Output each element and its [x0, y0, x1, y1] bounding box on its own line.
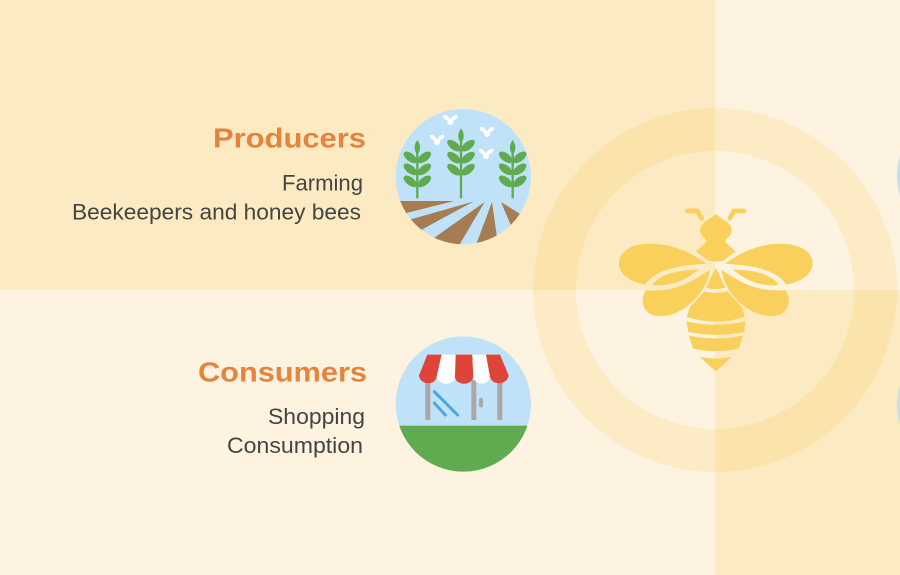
bee body [687, 268, 745, 371]
furrows [397, 201, 522, 247]
icon: partial circle bottom right [897, 337, 900, 473]
heading: Consumers: Consumers [198, 356, 367, 388]
text: Farming: Farming [282, 170, 363, 196]
icon: partial circle top right [897, 108, 900, 244]
text: Beekeepers and honey bees: Beekeepers and honey bees [72, 200, 361, 224]
heading: Producers: Producers [213, 122, 366, 154]
window glints [434, 392, 458, 415]
bee antennae [687, 211, 744, 218]
icon: market stall [390, 336, 537, 476]
awning [419, 355, 442, 383]
bee right wings [722, 244, 812, 316]
icon: farm field with wheat and bees [396, 109, 531, 247]
honeycomb ring around bee [533, 108, 897, 472]
wheat plants [404, 140, 432, 198]
bee head and thorax [696, 214, 736, 262]
text: Consumption: Consumption [227, 433, 363, 458]
bee emblem [619, 211, 812, 371]
ground [399, 426, 528, 472]
posts [425, 380, 502, 420]
flying bees [442, 114, 458, 125]
text: Shopping: Shopping [268, 404, 365, 429]
bee left wings [619, 244, 709, 316]
